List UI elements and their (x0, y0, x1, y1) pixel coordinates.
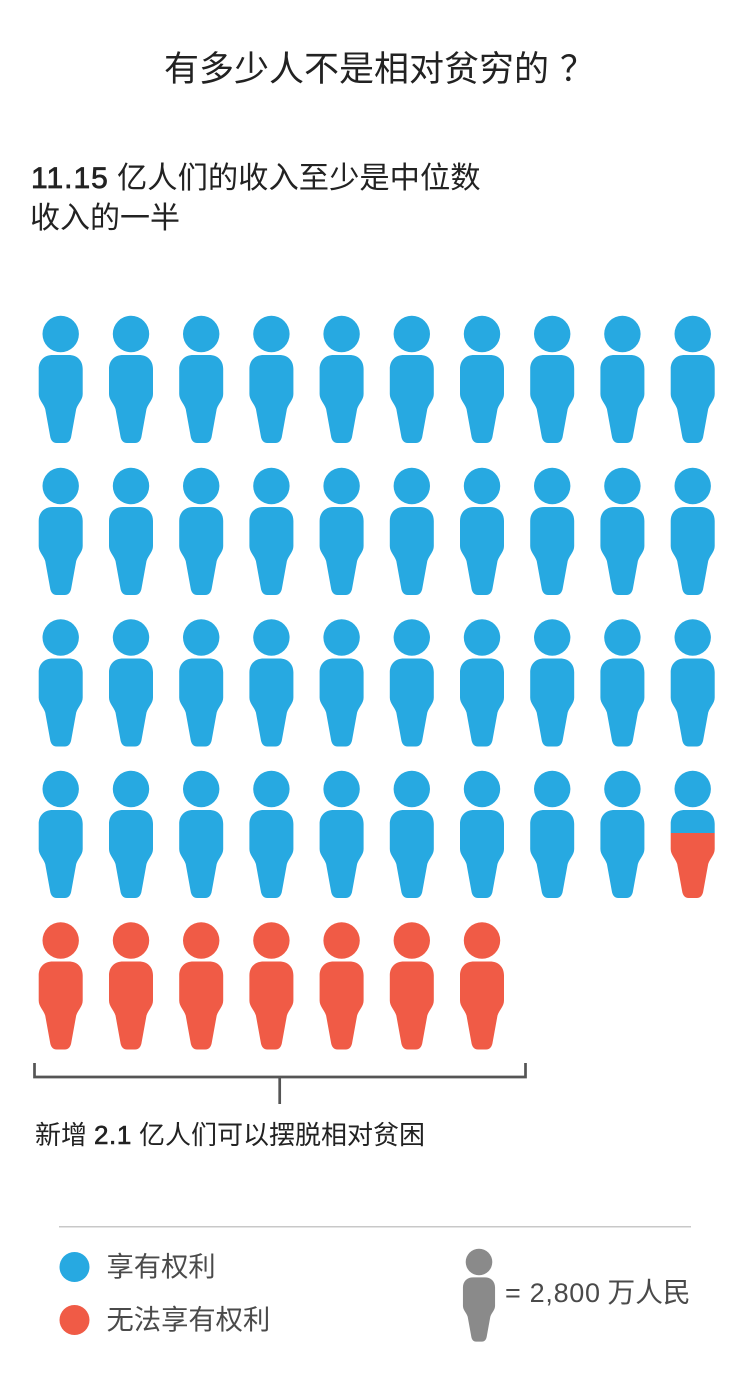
legend item: has rights (60, 1251, 216, 1282)
title: 有多少人不是相对贫穷的 ？ (164, 50, 595, 89)
legend scale: text: = 2,800 (505, 1278, 601, 1308)
bracket label: 亿人们可以摆脱相对贫困 (139, 1120, 425, 1150)
pictogram row 4: blue people with final split person (39, 771, 715, 898)
legend scale: text: 万人民 (608, 1277, 691, 1308)
legend (59, 1226, 691, 1342)
pictogram row 1: blue people (39, 316, 715, 443)
legend scale: person icon (463, 1249, 495, 1342)
pictogram row 2: blue people (39, 468, 715, 595)
subheading: 亿人们的收入至少是中位数 (117, 161, 481, 195)
bracket label: 2.1 (94, 1120, 132, 1150)
pictogram row 3: blue people (39, 619, 715, 746)
legend item: has rights: 享有权利 (106, 1251, 216, 1282)
bracket label: 新增 (35, 1120, 87, 1150)
subheading: 11.15 (31, 162, 109, 195)
legend item: no rights: 无法享有权利 (106, 1304, 270, 1335)
subheading (30, 161, 481, 235)
subheading: 收入的一半 (30, 202, 180, 235)
pictogram row 5: red people (39, 922, 504, 1050)
bracket (34, 1063, 526, 1104)
